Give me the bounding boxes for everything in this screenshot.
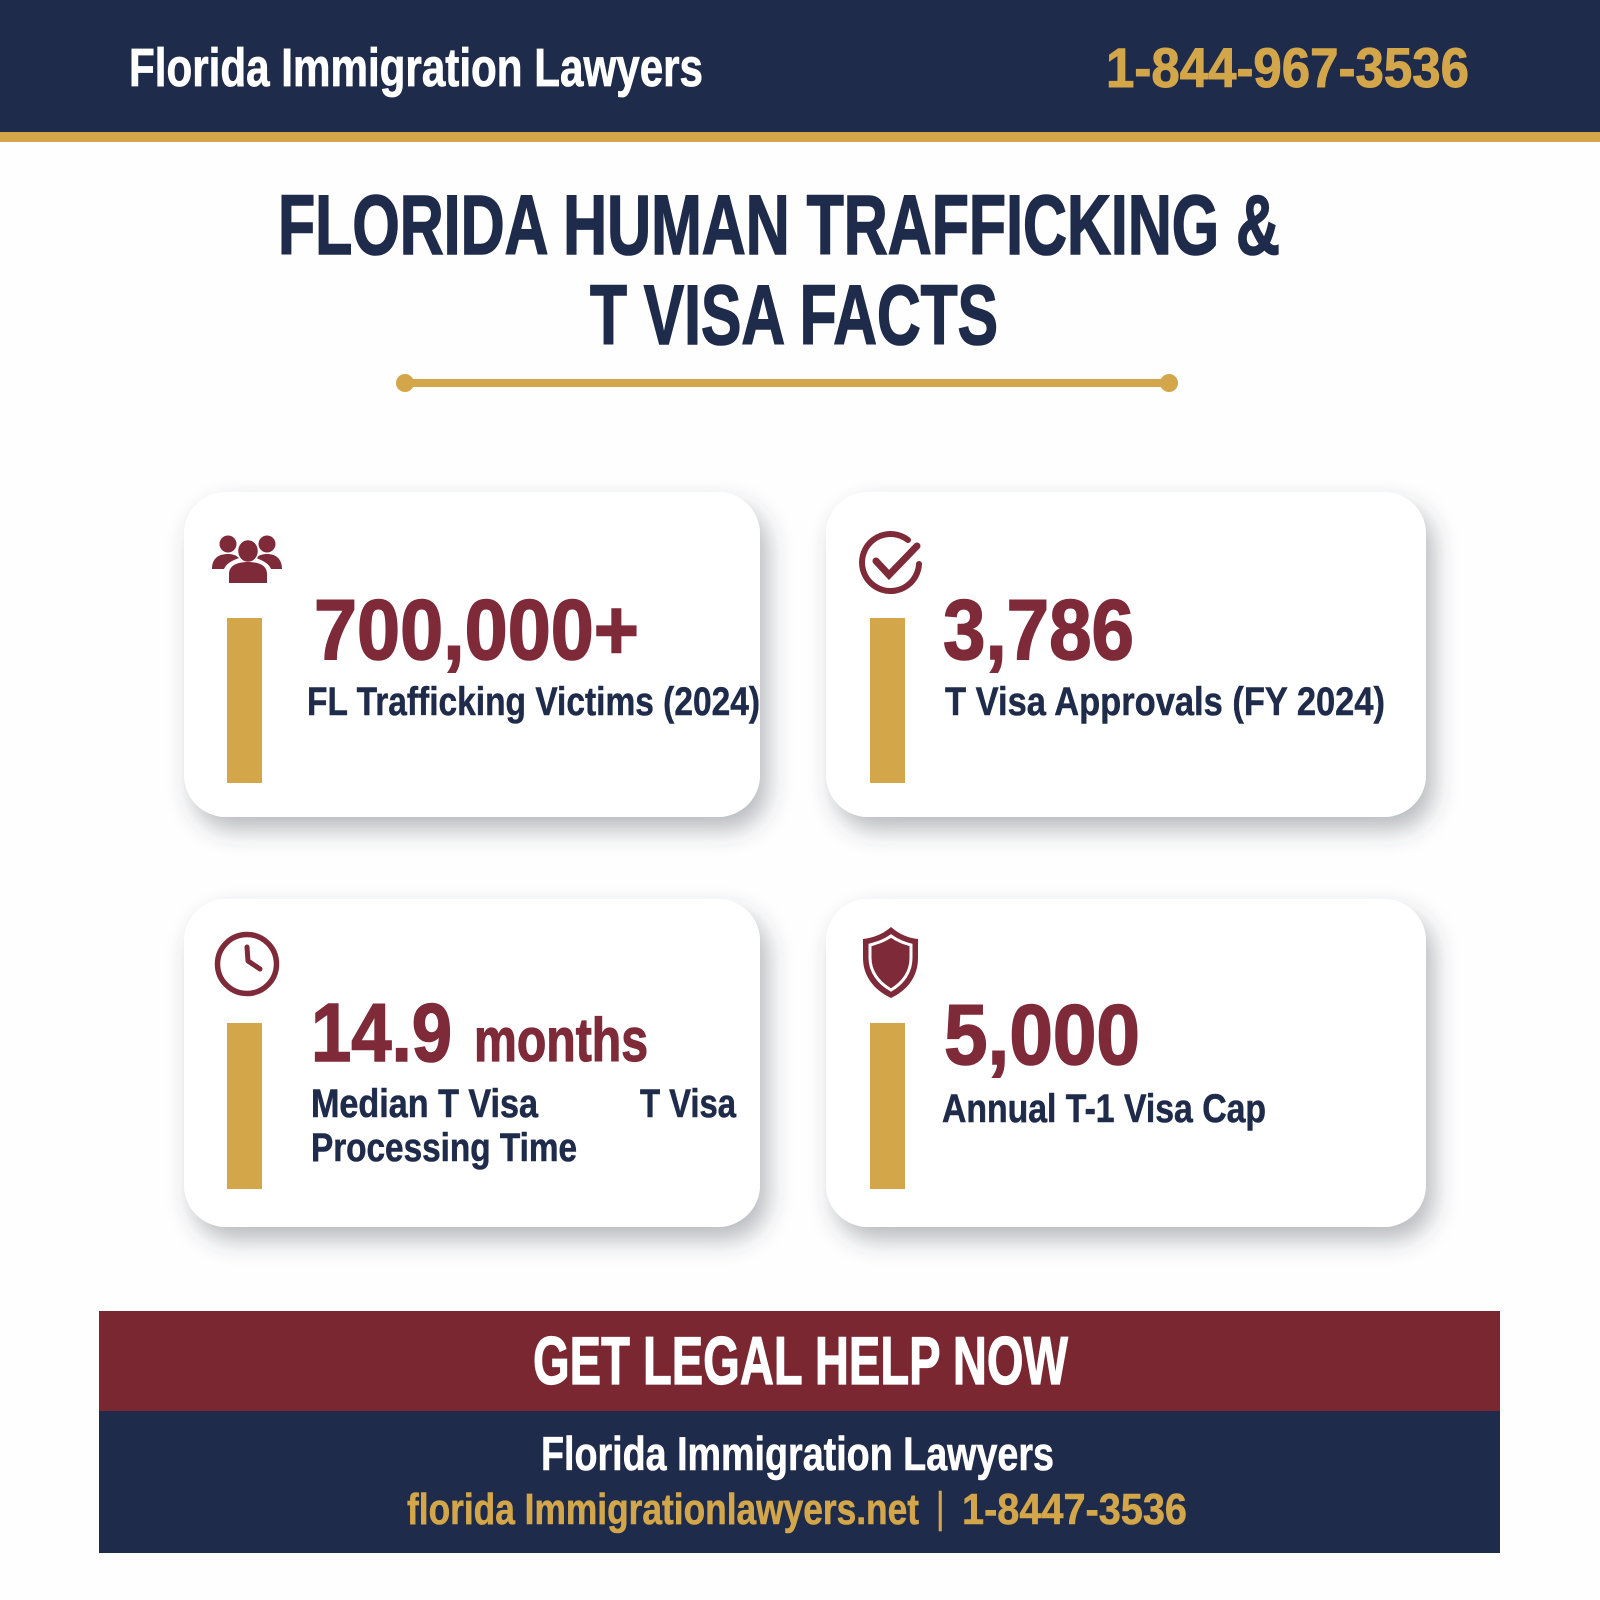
label <box>311 1082 737 1170</box>
footer website and phone: 1-8447-3536 <box>962 1485 1187 1534</box>
footer website and phone: florida Immigrationlawyers.net <box>407 1485 919 1534</box>
footer firm name: Florida Immigration Lawyers <box>541 1427 1054 1480</box>
label: T Visa Approvals (FY 2024) <box>945 680 1385 724</box>
call to action heading: GET LEGAL HELP NOW <box>533 1323 1069 1399</box>
label: Annual T-1 Visa Cap <box>942 1087 1266 1131</box>
label: Median T Visa <box>311 1082 539 1126</box>
icon: shield <box>863 927 918 998</box>
panel: trafficking victims <box>184 492 760 817</box>
icon: people group <box>212 536 282 583</box>
gold bar <box>227 618 262 783</box>
icon: clock <box>218 934 276 994</box>
header firm name: Florida Immigration Lawyers <box>129 38 703 98</box>
title underline <box>396 374 1178 392</box>
header phone number: 1-844-967-3536 <box>1106 36 1469 99</box>
panel: processing time <box>184 899 760 1227</box>
statistic: months <box>474 1006 648 1074</box>
title: T VISA FACTS <box>590 268 998 362</box>
statistic: 3,786 <box>943 583 1134 678</box>
statistic: 14.9 <box>311 986 452 1079</box>
gold bar <box>870 1023 905 1189</box>
header band <box>0 0 1600 142</box>
title <box>278 178 1280 362</box>
panel: annual visa cap <box>826 899 1426 1227</box>
icon: check circle <box>862 534 919 591</box>
statistic: 700,000+ <box>314 583 639 678</box>
gold bar <box>227 1023 262 1189</box>
statistic: 5,000 <box>944 988 1140 1083</box>
panel: T visa approvals <box>826 492 1426 817</box>
statistic <box>311 986 648 1079</box>
label: FL Trafficking Victims (2024) <box>307 680 760 724</box>
label: Processing Time <box>311 1126 577 1170</box>
gold bar <box>870 618 905 783</box>
footer contact panel <box>99 1411 1500 1553</box>
label: T Visa <box>640 1082 737 1126</box>
call to action banner <box>99 1311 1500 1411</box>
